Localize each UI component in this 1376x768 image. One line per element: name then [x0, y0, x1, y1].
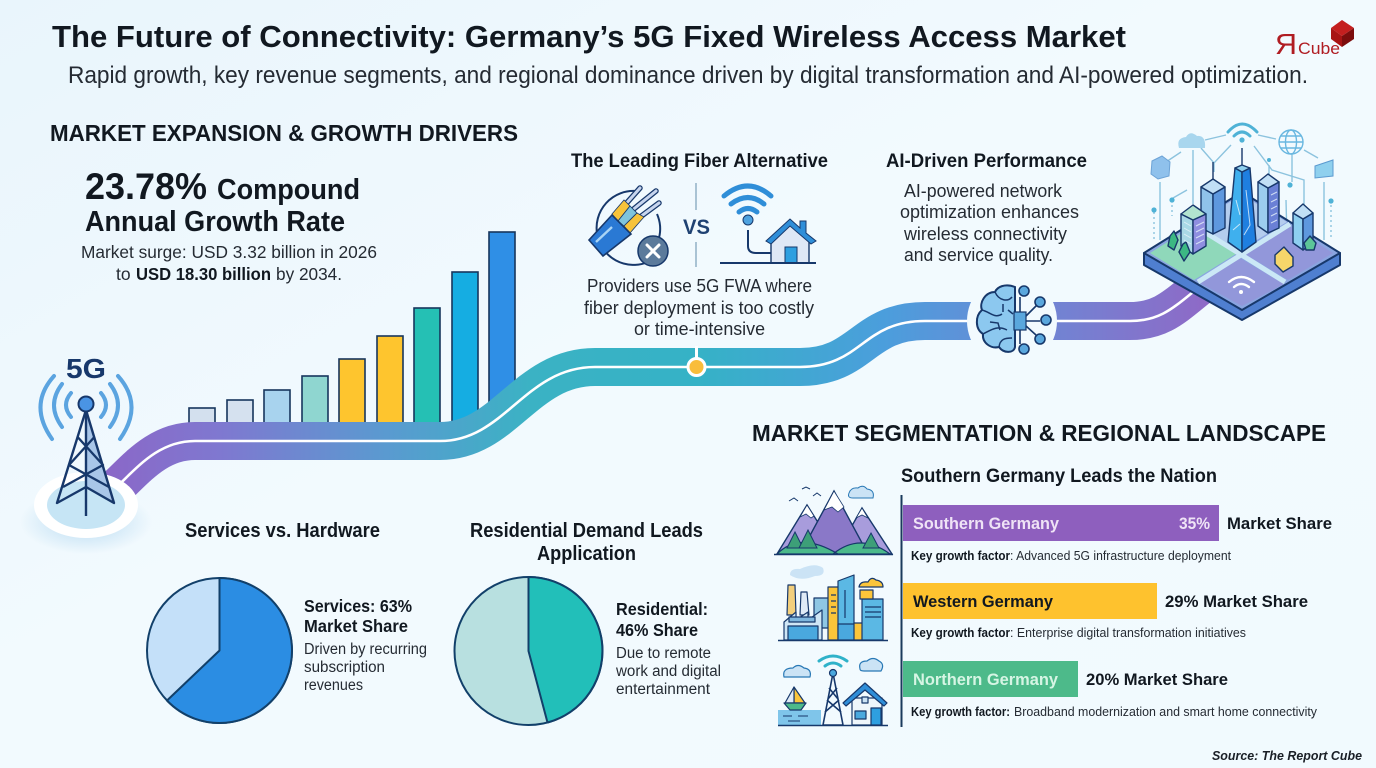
bar: northern germany: 20% Market Share — [1086, 670, 1228, 689]
bar: northern germany — [903, 661, 1228, 697]
bar: southern germany: 35% — [1179, 514, 1210, 533]
bar: western germany — [903, 583, 1308, 619]
CAGR statistic — [85, 166, 360, 238]
subtitle: Rapid growth, key revenue segments, and regional dominance driven by digital transformation and AI-powered optimization. — [68, 62, 1308, 89]
text: AI optimization: wireless connectivity — [903, 224, 1067, 244]
pie chart: services share — [147, 578, 292, 723]
heading: services vs hardware: Services vs. Hardware — [185, 520, 380, 542]
logo: RCube — [1275, 20, 1354, 61]
bar: western germany: Western Germany — [913, 592, 1054, 611]
ribbon: growth pathway — [105, 268, 1225, 497]
heading: residential demand: Residential Demand Leads — [470, 520, 703, 542]
platform base — [1144, 253, 1340, 320]
bar: southern germany: Market Share — [1227, 514, 1332, 533]
subheading: southern germany leads: Southern Germany Leads the Nation — [901, 466, 1217, 487]
text: residential callout: Residential: — [616, 599, 708, 619]
buildings — [1168, 148, 1316, 272]
icon: AI brain — [967, 275, 1057, 367]
text: western growth factor: : Enterprise digital transformation initiatives — [1010, 625, 1246, 640]
text: services callout: Market Share — [304, 616, 408, 636]
platform quadrants — [1150, 226, 1236, 280]
text: western growth factor — [911, 625, 1246, 640]
bar: southern germany — [903, 505, 1332, 541]
text: residential callout: 46% Share — [616, 620, 698, 640]
bar chart: growth bars — [189, 232, 515, 428]
text: services callout — [304, 596, 427, 694]
text: residential callout: work and digital — [615, 663, 721, 680]
icon: coast with tower and house — [778, 656, 888, 726]
logo: RCube: Cube — [1298, 39, 1340, 58]
icon: 5G tower: 5G — [66, 353, 106, 384]
heading: residential demand — [470, 520, 703, 565]
illustration: smart city platform — [1144, 124, 1340, 320]
CAGR statistic: Compound — [217, 174, 360, 206]
bar: northern germany: Northern Germany — [913, 670, 1059, 689]
text: AI optimization: optimization enhances — [900, 202, 1079, 222]
pie chart: residential share — [454, 577, 602, 725]
market surge text: by 2034. — [276, 264, 342, 284]
text: services callout: revenues — [304, 677, 363, 694]
VS divider: VS — [683, 216, 710, 239]
market surge text: USD 18.30 billion — [136, 264, 271, 284]
heading: market segmentation and regional landscape: MARKET SEGMENTATION & REGIONAL LANDSCAPE — [752, 420, 1326, 446]
text: services callout: subscription — [304, 659, 385, 676]
text: southern growth factor: Key growth factor — [911, 548, 1010, 563]
text: AI optimization: and service quality. — [904, 245, 1053, 265]
heading: AI-driven performance: AI-Driven Performance — [886, 150, 1087, 172]
source note: Source: The Report Cube — [1212, 749, 1362, 763]
text: providers explanation: or time-intensive — [634, 319, 765, 339]
connectivity icons — [1151, 124, 1334, 240]
market surge text — [81, 242, 377, 284]
text: providers explanation: fiber deployment is too costly — [584, 298, 814, 318]
text: services callout: Services: 63% — [304, 596, 412, 616]
icon: industrial city — [778, 565, 888, 640]
text: northern growth factor: Key growth factor: — [911, 704, 1010, 719]
title: The Future of Connectivity: Germany’s 5G Fixed Wireless Access Market — [52, 19, 1126, 54]
text: residential callout — [615, 599, 721, 698]
text: residential callout: entertainment — [616, 681, 711, 698]
icon: fiber cable crossed out — [589, 188, 668, 266]
icon: mountains — [774, 486, 893, 554]
text: services callout: Driven by recurring — [304, 641, 427, 658]
text: southern growth factor: : Advanced 5G infrastructure deployment — [1010, 548, 1231, 563]
heading: market expansion and growth drivers: MARKET EXPANSION & GROWTH DRIVERS — [50, 120, 518, 146]
text: western growth factor: Key growth factor — [911, 625, 1010, 640]
CAGR statistic: Annual Growth Rate — [85, 206, 345, 238]
text: providers explanation — [584, 276, 814, 339]
VS divider — [683, 183, 710, 267]
text: AI optimization — [900, 181, 1079, 265]
CAGR statistic: 23.78% — [85, 166, 207, 207]
bar: southern germany: Southern Germany — [913, 514, 1060, 533]
heading: residential demand: Application — [537, 543, 636, 565]
text: AI optimization: AI-powered network — [904, 181, 1063, 201]
text: providers explanation: Providers use 5G FWA where — [587, 276, 812, 296]
market surge text: to — [116, 264, 131, 284]
marker: ribbon callout dot — [688, 346, 705, 376]
heading: leading fiber alternative: The Leading Fiber Alternative — [571, 150, 828, 172]
text: northern growth factor: Broadband modernization and smart home connectivity — [1014, 704, 1317, 719]
platform wifi — [1229, 277, 1254, 287]
icon: wifi house — [720, 186, 816, 263]
icon: 5G tower — [20, 353, 152, 554]
logo: RCube: Я — [1275, 29, 1297, 61]
market surge text: Market surge: USD 3.32 billion in 2026 — [81, 242, 377, 262]
bar: western germany: 29% Market Share — [1165, 592, 1308, 611]
text: residential callout: Due to remote — [616, 645, 711, 662]
text: southern growth factor — [911, 548, 1231, 563]
